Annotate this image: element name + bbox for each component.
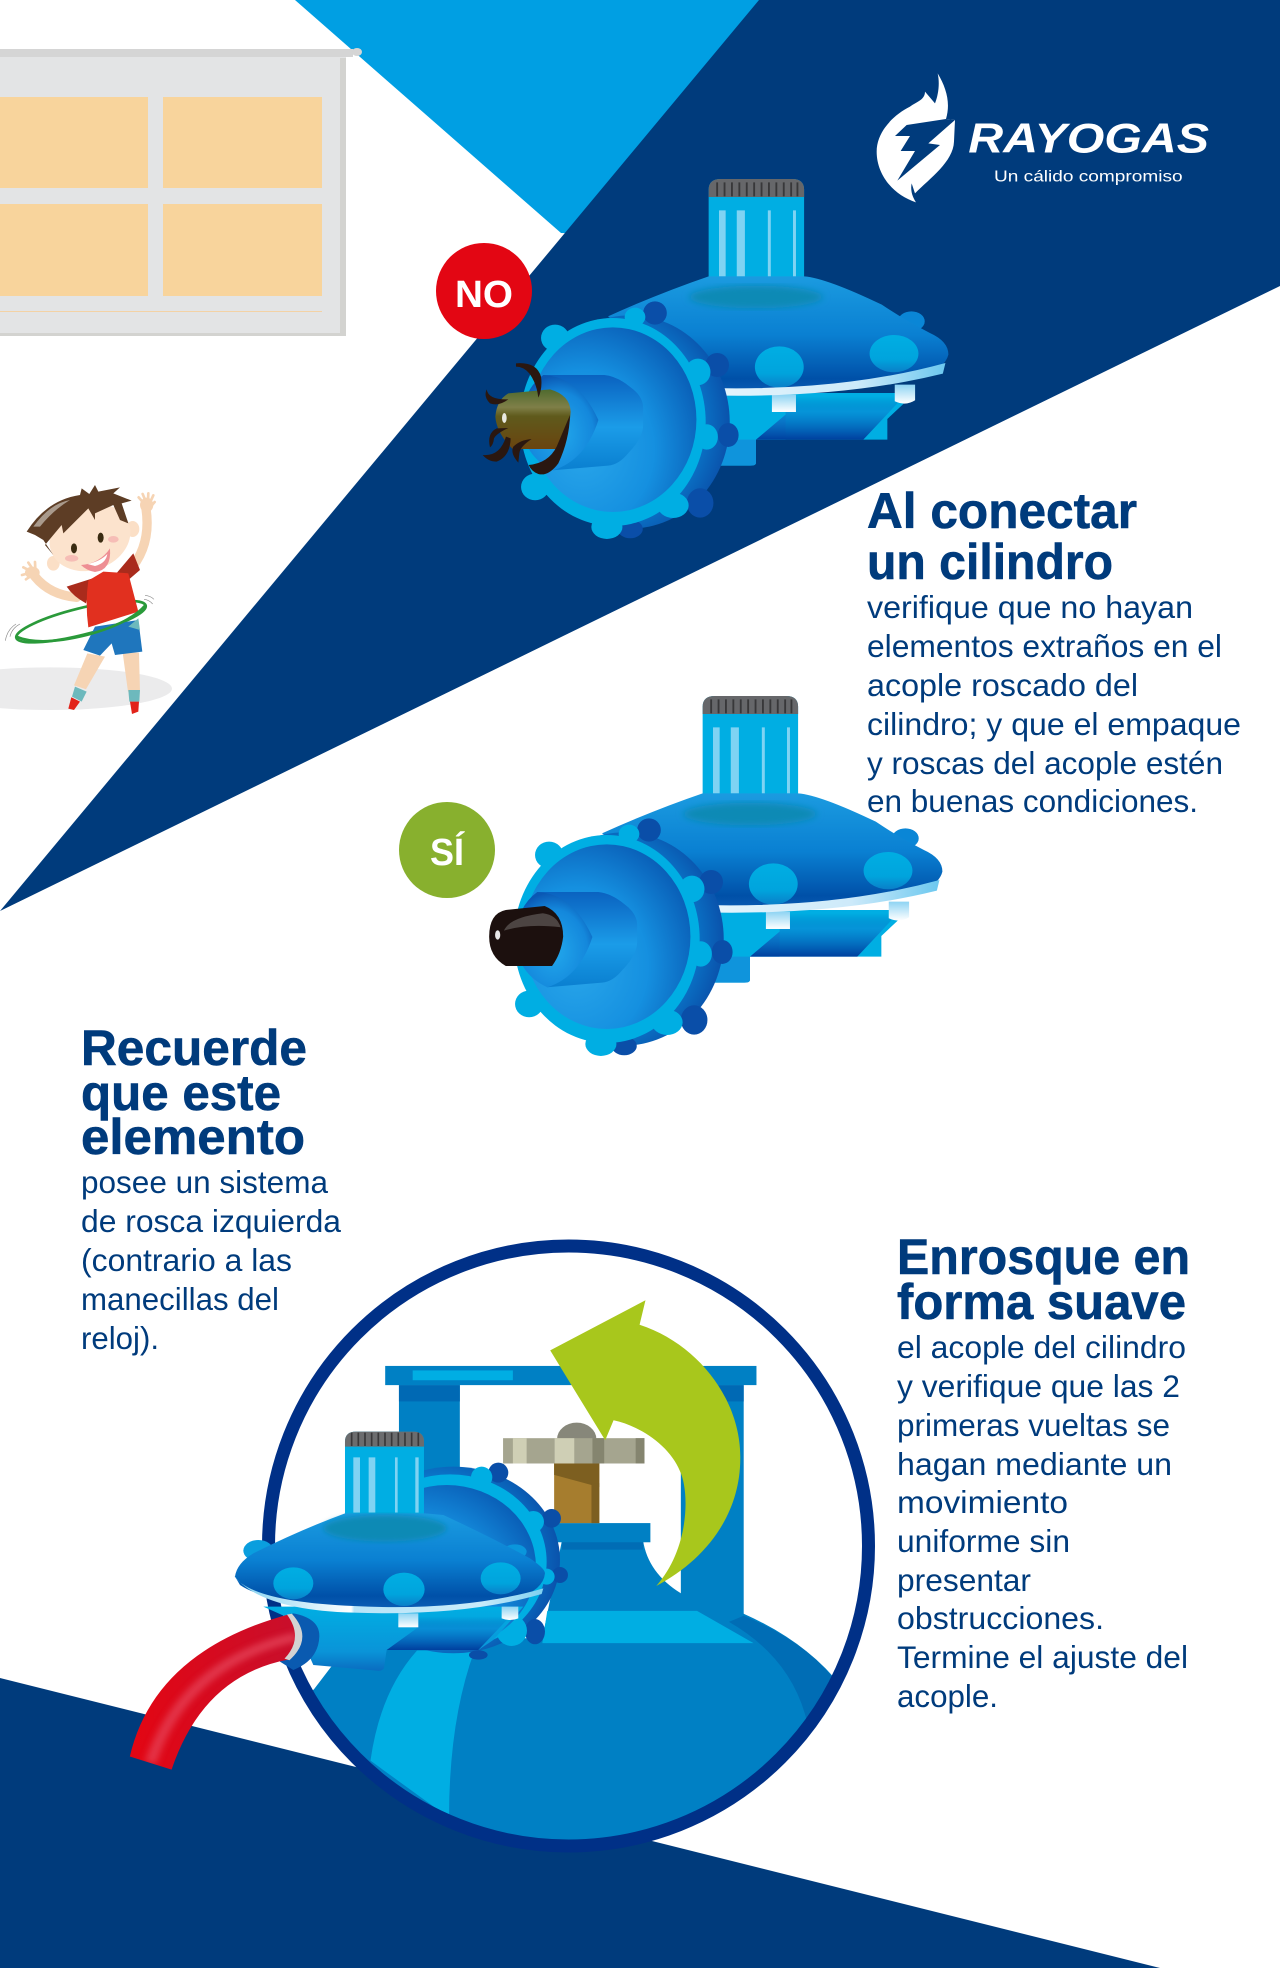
arrow: counter-clockwise green [550,1300,740,1586]
text block: rosca izquierda: de rosca izquierda [81,1203,341,1239]
background: navy upper diagonal [0,0,1280,911]
heading: Enrosque en forma suave: Enrosque en [897,1229,1190,1285]
heading: Al conectar un cilindro [867,483,1137,590]
housing [263,1607,523,1671]
text block: rosca izquierda [81,1164,341,1356]
regulator with hose [130,1432,568,1770]
hose [130,1614,302,1770]
text block: el acople: primeras vueltas se [897,1407,1170,1443]
background: light blue triangle [295,0,770,240]
text block: el acople: movimiento [897,1484,1068,1520]
heading: Recuerde que este elemento [81,1020,307,1165]
text block: el acople: acople. [897,1678,998,1714]
text block: rosca izquierda: reloj). [81,1320,159,1356]
window illustration [0,48,362,336]
stem and cap [345,1432,424,1515]
heading: Recuerde que este elemento: Recuerde [81,1020,307,1076]
gas cylinder [312,1366,832,1840]
icon: black cap [489,906,563,966]
illustration: boy with hula hoop [0,485,172,714]
badge: NO [436,243,532,339]
tagline: Un cálido compromiso [994,169,1183,186]
text block: rosca izquierda: posee un sistema [81,1164,328,1200]
back flange [347,1463,568,1660]
text block: el acople: uniforme sin [897,1523,1070,1559]
heading: Al conectar un cilindro: Al conectar [867,483,1137,539]
regulator: NO (with beetle) [520,179,948,539]
badge: SÍ [399,802,495,898]
text block: rosca izquierda: (contrario a las [81,1242,292,1278]
text block: verifique [867,589,1241,819]
ring [268,1246,868,1846]
heading: Enrosque en forma suave: forma suave [897,1274,1186,1330]
heading: Al conectar un cilindro: un cilindro [867,534,1113,590]
brand name: RAYOGAS [968,114,1209,161]
connector [280,1613,319,1670]
circle: cylinder illustration [262,1240,886,1883]
text block: el acople: presentar [897,1562,1031,1598]
text block: verifique: cilindro; y que el empaque [867,706,1241,742]
text block: verifique: elementos extraños en el [867,628,1222,664]
dome [233,1513,545,1613]
text block: el acople: Termine el ajuste del [897,1639,1188,1675]
text block: el acople [897,1329,1188,1714]
heading: Enrosque en forma suave [897,1229,1190,1330]
badge: NO: NO [455,274,513,316]
icon: beetle in regulator inlet [483,363,571,474]
logo: Rayogas [877,73,1209,202]
text block: rosca izquierda: manecillas del [81,1281,279,1317]
regulator: SÍ (with cap) [489,696,942,1056]
text block: verifique: verifique que no hayan [867,589,1193,625]
text block: verifique: en buenas condiciones. [867,783,1198,819]
icon: flame with lightning [877,73,955,202]
badge: SÍ: SÍ [430,830,465,874]
text block: verifique: y roscas del acople estén [867,745,1223,781]
background: navy bottom wedge [0,1678,1160,1968]
heading: Recuerde que este elemento: elemento [81,1109,305,1165]
text block: el acople: y verifique que las 2 [897,1368,1180,1404]
text block: verifique: acople roscado del [867,667,1138,703]
text block: el acople: hagan mediante un [897,1446,1172,1482]
valve [503,1423,644,1523]
text block: el acople: el acople del cilindro [897,1329,1186,1365]
heading: Recuerde que este elemento: que este [81,1065,281,1121]
text block: el acople: obstrucciones. [897,1600,1104,1636]
